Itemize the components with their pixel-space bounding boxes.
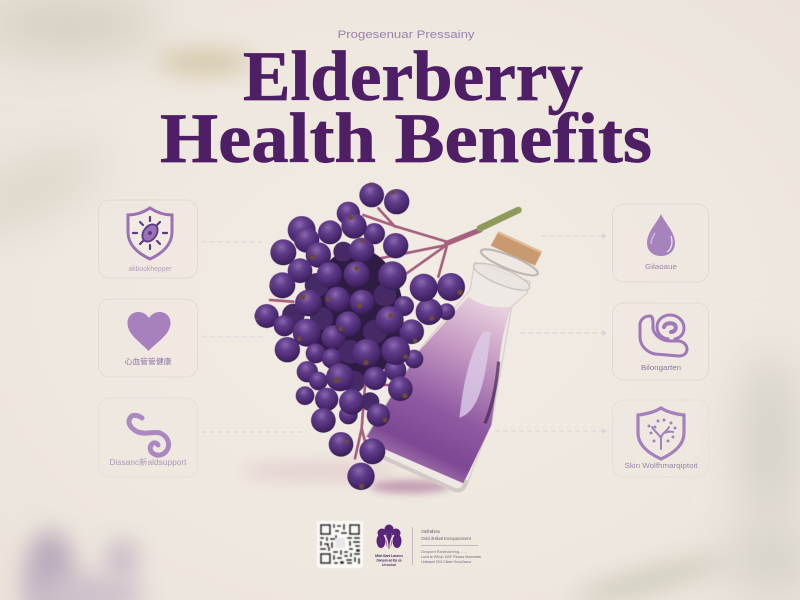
icon: immune shield bbox=[128, 208, 172, 259]
logo: Mrid Sanl Lasecn bbox=[375, 553, 404, 558]
label: Dissanc新aldsupport bbox=[110, 457, 187, 467]
label: akbookhepper bbox=[128, 264, 172, 273]
icon: gut bbox=[640, 315, 687, 356]
liquid bbox=[367, 297, 512, 483]
cork bbox=[491, 232, 542, 266]
footer text: Lusd te Whop 1WF Rlussa Mosmdas bbox=[421, 555, 481, 559]
dark cluster core bbox=[310, 248, 403, 382]
icon: swirl bbox=[129, 415, 169, 455]
title: Elderberry bbox=[243, 38, 583, 116]
panel: gut card bbox=[612, 303, 708, 380]
logo: Unoshal bbox=[382, 563, 396, 567]
title bbox=[160, 38, 652, 178]
hero illustration: elderberries and bottle bbox=[243, 183, 542, 493]
footer text: Osbl dHiketl Ensoparament bbox=[421, 536, 472, 541]
collar bbox=[471, 258, 532, 295]
icon: water drop bbox=[647, 214, 675, 256]
panel: immune card bbox=[98, 200, 198, 278]
glass body bbox=[365, 262, 531, 492]
panel: skin card bbox=[612, 400, 708, 477]
filler berries bbox=[282, 242, 396, 411]
footer text: Unfwoed S03 Cltaer Guxs2ssca bbox=[421, 560, 472, 564]
panel: digestive swirl card bbox=[98, 398, 198, 477]
eyebrow text: Progesenuar Pressainy bbox=[338, 29, 475, 41]
panel: drop card bbox=[612, 204, 708, 282]
logo bbox=[375, 524, 404, 567]
icon: skin shield bbox=[638, 408, 684, 459]
connectors bbox=[202, 233, 607, 434]
footer bbox=[317, 521, 481, 568]
label: Bilongarten bbox=[641, 363, 681, 372]
bottle bbox=[365, 232, 542, 492]
footer text: O3cl hafnena bbox=[421, 529, 440, 534]
label: 心血管管健康 bbox=[124, 356, 172, 366]
icon: heart bbox=[128, 312, 170, 351]
footer text: Oxsyord Ramtukmmg....... bbox=[421, 550, 467, 554]
title: Health Benefits bbox=[160, 100, 652, 178]
stems bbox=[270, 208, 518, 458]
divider bbox=[412, 527, 414, 565]
label: Gilaoaue bbox=[645, 262, 677, 271]
footer text bbox=[421, 529, 481, 564]
logo: Danson ad ibs ca bbox=[376, 558, 402, 562]
berry calyx marks bbox=[256, 183, 463, 489]
lip bbox=[478, 245, 540, 280]
QR code bbox=[317, 521, 363, 568]
berries bbox=[255, 183, 465, 490]
label: Skin Wolfhmarqiptoit bbox=[624, 461, 698, 470]
panel: heart card bbox=[98, 299, 198, 377]
ground shadow bbox=[243, 462, 450, 493]
